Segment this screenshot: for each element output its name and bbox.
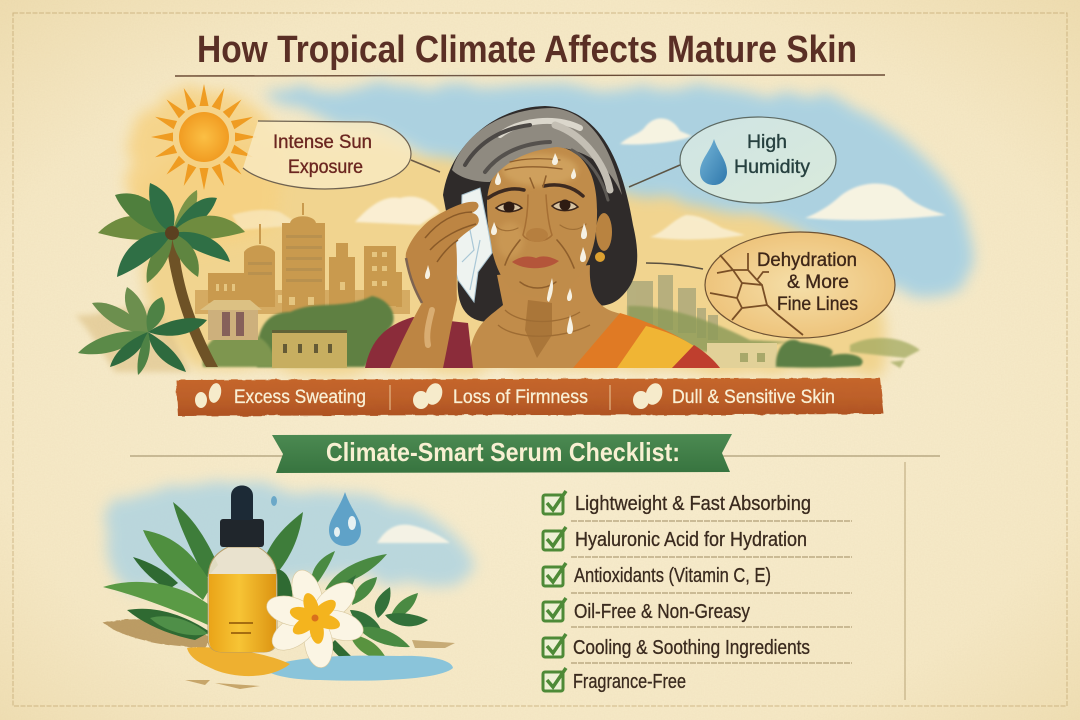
checklist heading ribbon: Climate-Smart Serum Checklist: — [326, 437, 680, 467]
box building — [272, 332, 347, 368]
callout: intense sun exposure: Exposure — [288, 157, 363, 178]
item: oil-free — [543, 598, 750, 623]
grey hair — [452, 108, 622, 195]
checklist — [543, 462, 905, 700]
clouds — [232, 118, 946, 239]
effect: excess sweating: Excess Sweating — [234, 387, 366, 408]
icon: sun — [151, 84, 257, 190]
warm glow behind sun — [125, 90, 285, 250]
icon: water drop — [700, 139, 727, 185]
puddles — [263, 656, 453, 681]
soil — [103, 619, 212, 648]
item: antioxidants — [543, 563, 771, 587]
warm wash — [134, 140, 888, 372]
title: How Tropical Climate Affects Mature Skin — [197, 29, 857, 71]
item: antioxidants: Antioxidants (Vitamin C, E) — [574, 565, 771, 587]
icon: plumeria flower — [263, 566, 367, 669]
tissue — [452, 188, 492, 302]
arm and hand — [390, 202, 479, 368]
item: fragrance-free — [543, 668, 686, 693]
item: cooling: Cooling & Soothing Ingredients — [573, 637, 810, 659]
callout: dehydration and fine lines: Dehydration — [757, 250, 857, 271]
sweat drops — [491, 153, 587, 334]
effects band — [176, 378, 884, 416]
icon: large palm tree — [98, 183, 245, 367]
sari — [573, 313, 720, 368]
ear and earring — [596, 213, 612, 251]
illustration: serum bottle with tropical leaves — [103, 484, 470, 689]
panel: tropical scene — [75, 84, 975, 375]
item: oil-free: Oil-Free & Non-Greasy — [574, 601, 750, 623]
callout: dehydration and fine lines: & More — [787, 272, 849, 293]
callout: intense sun exposure — [243, 121, 440, 189]
leaves — [103, 502, 428, 665]
facial features — [488, 159, 586, 288]
blue wash — [103, 484, 470, 590]
item: hyaluronic acid: Hyaluronic Acid for Hydration — [575, 529, 807, 551]
callout: intense sun exposure: Intense Sun — [273, 132, 372, 153]
callout: high humidity: Humidity — [734, 157, 811, 178]
item: fragrance-free: Fragrance-Free — [573, 671, 686, 693]
callout: dehydration and fine lines — [646, 232, 895, 338]
blouse — [365, 317, 473, 368]
effect: dull and sensitive skin: Dull & Sensitive Skin — [672, 387, 835, 408]
effect: dull and sensitive skin — [633, 381, 835, 409]
cloud — [377, 525, 450, 543]
callout: dehydration and fine lines: Fine Lines — [777, 294, 858, 315]
item: cooling — [543, 634, 810, 659]
icon: water droplet — [329, 492, 361, 546]
checklist heading ribbon — [130, 434, 940, 473]
right foliage and low buildings — [628, 306, 920, 368]
illustration: woman wiping sweat — [365, 106, 720, 368]
icon: small palm tree — [78, 287, 207, 375]
face — [487, 146, 597, 297]
effect: excess sweating — [195, 382, 366, 408]
back hair — [443, 106, 637, 322]
bottle — [208, 486, 277, 652]
temple — [200, 300, 262, 310]
effect: loss of firmness — [413, 381, 588, 409]
right city skyline — [627, 275, 718, 340]
callout: high humidity — [629, 117, 836, 203]
item: lightweight: Lightweight & Fast Absorbing — [575, 493, 811, 515]
left city skyline — [195, 203, 410, 314]
effect: loss of firmness: Loss of Firmness — [453, 387, 588, 408]
callout: high humidity: High — [747, 132, 787, 153]
blue sky wash — [260, 86, 975, 297]
neck and chest — [468, 265, 622, 368]
left foliage and low buildings — [75, 296, 394, 372]
